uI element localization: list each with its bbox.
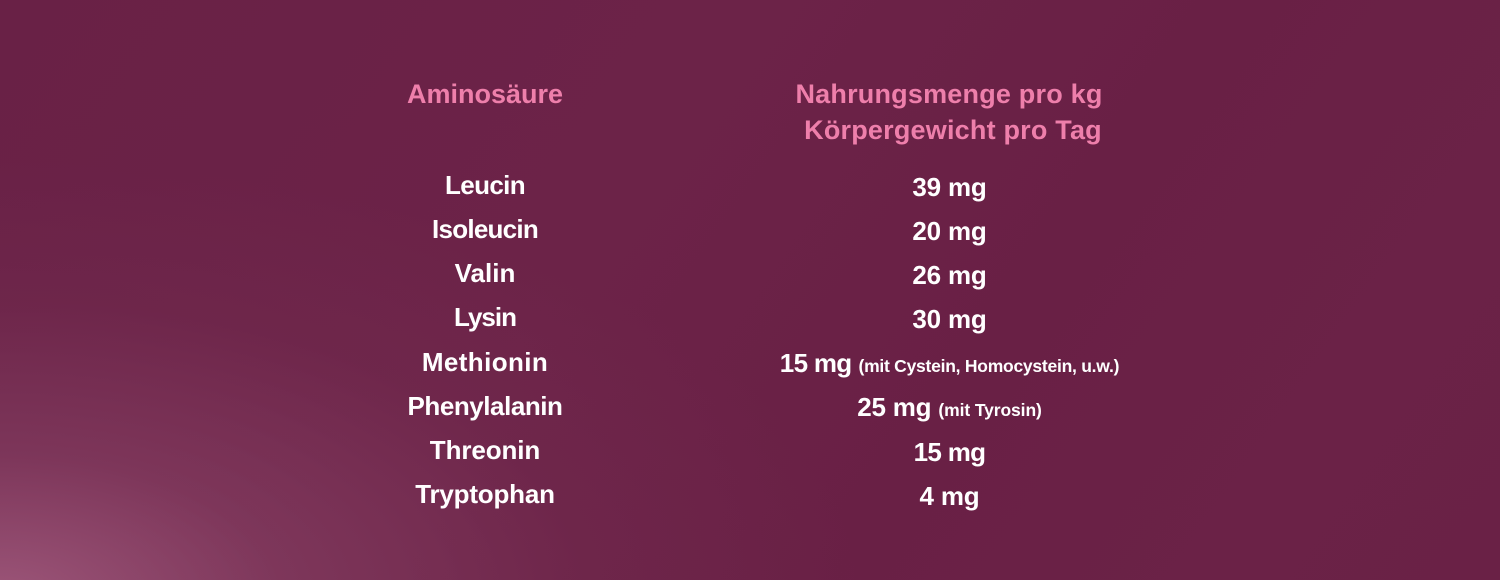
amino acid names column: Threonin xyxy=(430,435,540,465)
amounts column: 15 mg xyxy=(914,437,985,467)
amounts column: 20 mg xyxy=(912,216,987,246)
amounts column: 26 mg xyxy=(912,260,987,290)
heading: Aminosäure: Aminosäure xyxy=(407,79,563,109)
heading: Nahrungsmenge: Körpergewicht pro Tag xyxy=(804,115,1102,145)
amino acid names column: Tryptophan xyxy=(415,479,555,509)
amino acid names column: Leucin xyxy=(445,170,525,200)
amino acid names column: Isoleucin xyxy=(432,214,538,244)
amounts column: 15 mg (mit Cystein, Homocystein, u.w.) xyxy=(780,348,1119,378)
amounts column: 25 mg (mit Tyrosin) xyxy=(857,392,1042,422)
amino acid names column: Lysin xyxy=(454,302,516,332)
amounts column: 4 mg xyxy=(920,481,979,511)
amino acid names column: Valin xyxy=(455,258,515,288)
heading: Nahrungsmenge: Nahrungsmenge pro kg xyxy=(795,79,1103,109)
amounts column: 39 mg xyxy=(912,172,987,202)
amounts column: 30 mg xyxy=(912,304,987,334)
amino acid names column: Methionin xyxy=(422,347,548,377)
heading: Nahrungsmenge xyxy=(795,79,1103,145)
amino acid names column: Phenylalanin xyxy=(408,391,562,421)
